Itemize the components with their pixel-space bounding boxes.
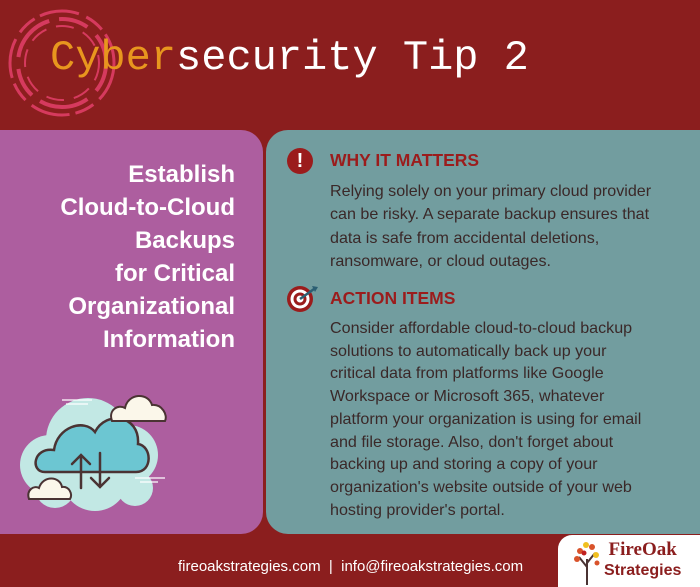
heading: tip title: for Critical [115, 260, 235, 287]
logo text [604, 539, 681, 579]
panel: left purple [0, 130, 263, 534]
heading: tip title: Backups [135, 227, 235, 254]
text: why it matters body: ransomware, or cloud outages. [330, 252, 551, 270]
text: action items body: Workspace or Microsoft 365, whatever [330, 387, 604, 405]
text: action items body: critical data from platforms like Google [330, 364, 604, 382]
icon: exclamation [287, 148, 313, 174]
text: action items body: organization's website outside of your web [330, 478, 632, 496]
text: action items body: solutions to automatically back up your [330, 342, 606, 360]
text: action items body [330, 319, 641, 519]
icon: decorative target rings [8, 10, 116, 116]
icon: target [287, 286, 318, 312]
text: action items body: platform your organization is using for email [330, 410, 641, 428]
text: action items body: Consider affordable cloud-to-cloud backup [330, 319, 632, 337]
title: Cybersecurity Tip 2 [50, 34, 529, 82]
heading: tip title: Organizational [68, 293, 235, 320]
text: why it matters body: data is safe from accidental deletions, [330, 229, 599, 247]
logo text: FireOak [609, 539, 677, 560]
icon: tree [574, 542, 600, 585]
text: action items body: and file storage. Also, don't forget about [330, 433, 613, 451]
text: action items body: hosting provider's portal. [330, 501, 505, 519]
heading: action items: ACTION ITEMS [330, 288, 455, 308]
heading: tip title: Information [103, 326, 235, 353]
text: why it matters body: Relying solely on your primary cloud provider [330, 182, 651, 200]
icon: exclamation: ! [297, 150, 303, 172]
heading: why it matters: WHY IT MATTERS [330, 150, 479, 170]
footer text: fireoakstrategies.com | info@fireoakstrategies.com [178, 558, 523, 575]
panel: right teal [266, 130, 700, 534]
text: action items body: backing up and storing a copy of your [330, 455, 598, 473]
heading: tip title: Establish [128, 161, 235, 188]
icon: cloud with arrows [20, 395, 167, 511]
heading: tip title: Cloud-to-Cloud [60, 194, 235, 221]
logo text: Strategies [604, 562, 681, 579]
text: why it matters body [330, 182, 651, 270]
logo box [558, 535, 700, 587]
text: why it matters body: can be risky. A separate backup ensures that [330, 205, 649, 223]
heading: tip title [60, 161, 235, 353]
